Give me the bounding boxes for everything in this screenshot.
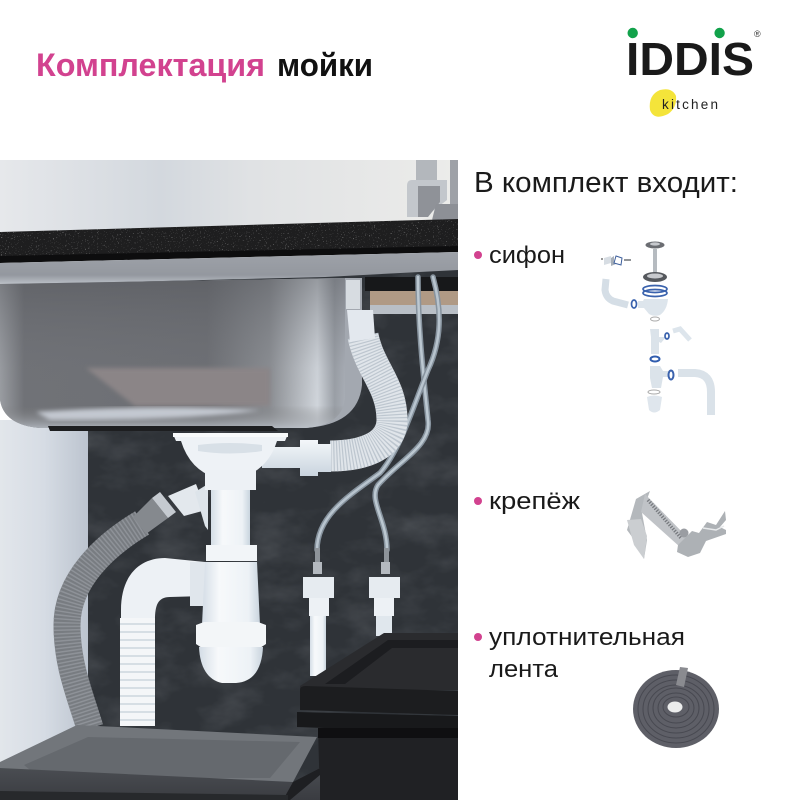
drain connector [262,440,331,476]
icon: tape roll [633,667,719,748]
heading: included in the kit: В комплект входит: [474,167,738,199]
corrugated outlet pipe [120,618,155,726]
sink rim [0,252,458,285]
angle valves [303,548,400,676]
sink corner bracket [346,280,360,309]
hose adapter [133,484,206,534]
photo: sink installation [0,160,458,800]
logo: IDDIS kitchen: IDDIS [626,33,754,85]
list item: fasteners: крепёж [489,488,581,515]
slate backsplash [88,270,458,800]
list item: sealing tape: лента [489,656,558,683]
water hoses [317,277,439,550]
list item: sealing tape: уплотнительная [489,624,685,651]
black bin [297,633,458,800]
logo: IDDIS kitchen: ® [754,29,761,39]
siphon tee [195,470,257,561]
siphon outlet elbow [121,558,205,618]
countertop [0,219,458,263]
icon: siphon parts [601,242,711,415]
icon: mounting clip [627,491,726,559]
siphon trap [190,562,266,683]
wall [0,160,450,232]
wood shelf [365,277,458,314]
list item: siphon: сифон [489,242,565,269]
overflow elbow [347,310,375,342]
strainer bowl [173,433,288,478]
washing machine hose [67,523,142,728]
faucet [407,160,458,220]
title: Комплектация [36,47,265,83]
title: мойки [277,47,373,83]
logo: IDDIS kitchen: kitchen [662,97,720,112]
corrugated drain hose: overflow [330,336,392,456]
title [36,47,373,83]
sink bowl [0,278,362,431]
left wall [0,420,88,800]
grey bin [0,725,320,800]
list item: sealing tape [474,624,685,683]
logo: IDDIS kitchen [626,28,761,117]
